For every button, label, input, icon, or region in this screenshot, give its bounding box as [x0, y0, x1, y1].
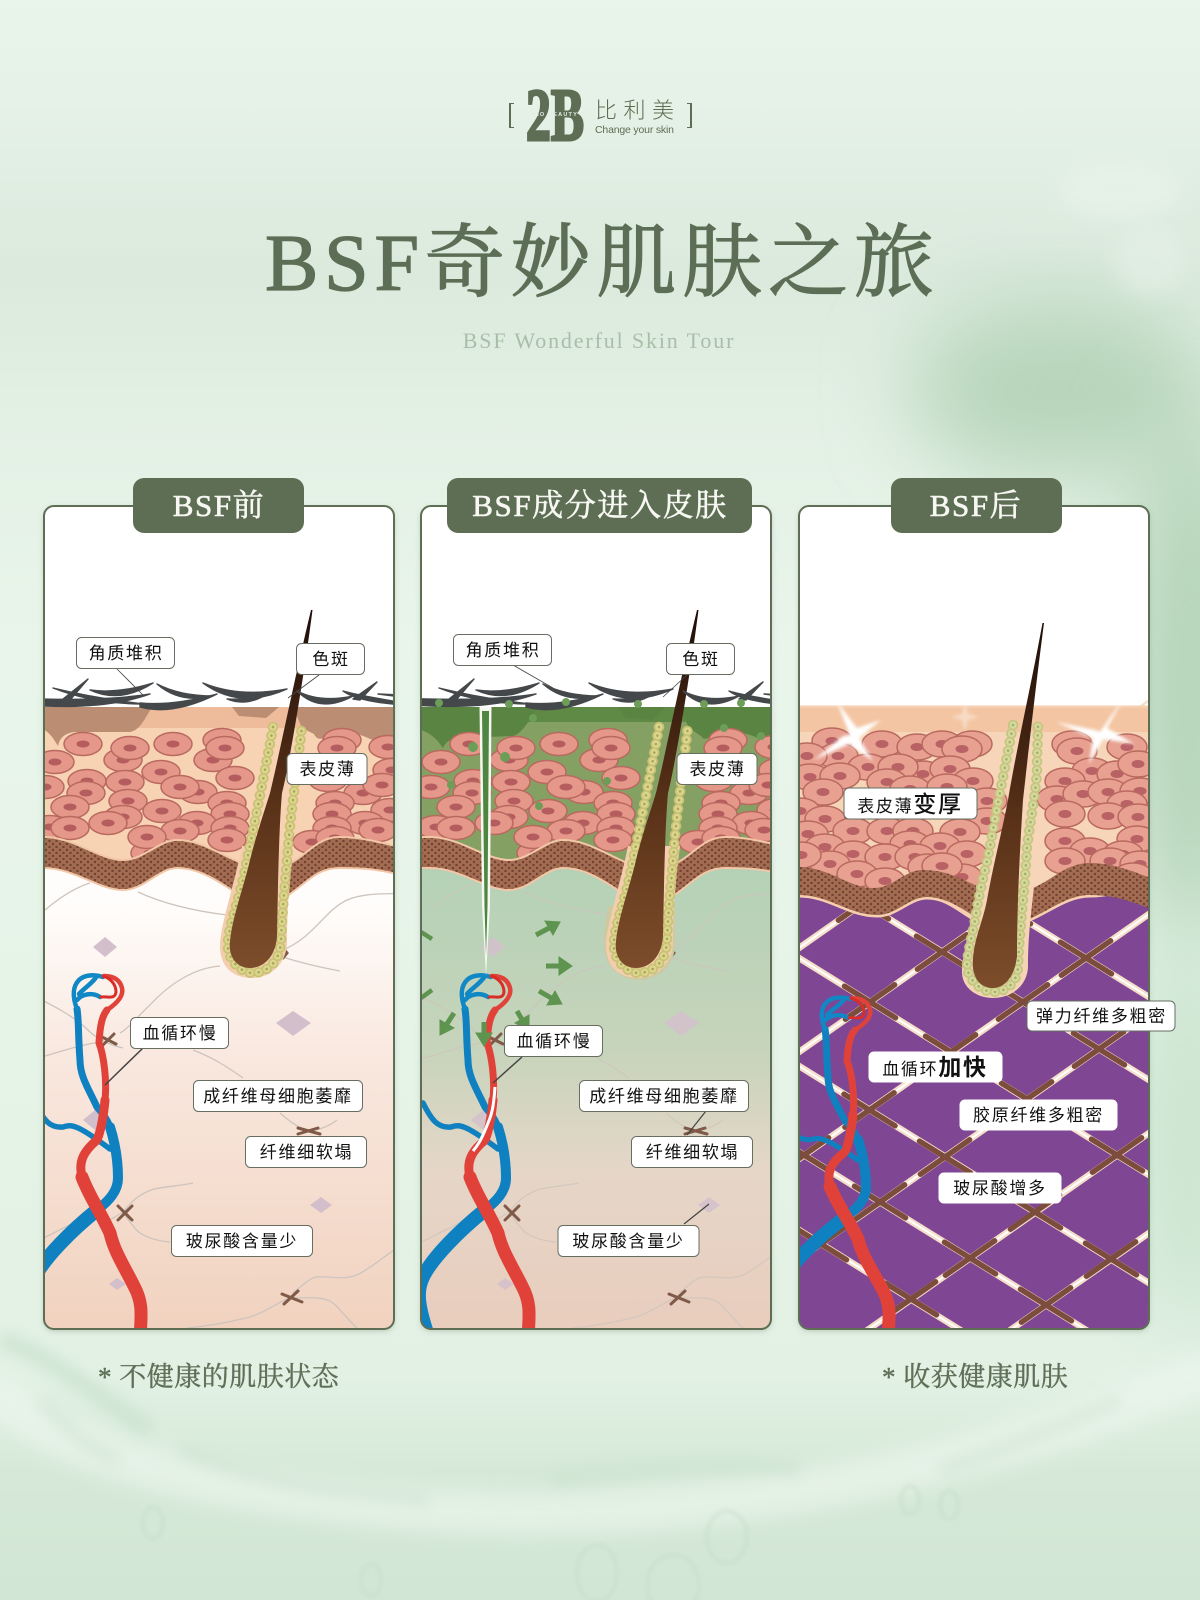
needle of ingredients [480, 707, 492, 976]
heading tab: BSF后: BSF后 [930, 488, 1022, 523]
label: 表皮薄: 表皮薄 [299, 760, 356, 779]
label: 纤维细软塌 [246, 1136, 366, 1168]
water bubbles [143, 1486, 958, 1600]
heading tab: BSF前: BSF前 [173, 488, 265, 523]
label: 角质堆积: 角质堆积 [89, 644, 163, 663]
panel 1 skin illustration [45, 610, 393, 1328]
label: 色斑: 色斑 [312, 650, 350, 669]
label: 胶原纤维多粗密 [960, 1100, 1117, 1130]
epidermis [789, 708, 1159, 920]
label: 血循环慢 [130, 1018, 228, 1048]
label: 纤维细软塌: 纤维细软塌 [646, 1143, 739, 1162]
hair and follicle [962, 623, 1044, 998]
logo: 2B [526, 75, 584, 157]
panel: BSF ingredients entering skin [418, 505, 774, 1334]
label: 弹力纤维多粗密: 弹力纤维多粗密 [1036, 1007, 1167, 1026]
label: 表皮薄: 表皮薄 [689, 760, 746, 779]
logo: BIO BEAUTY [532, 112, 578, 118]
label: 玻尿酸含量少: 玻尿酸含量少 [186, 1232, 298, 1251]
label: 血循环慢: 血循环慢 [517, 1031, 591, 1051]
label: 色斑 [296, 644, 364, 674]
footnote: healthy skin: * 收获健康肌肤 [882, 1362, 1068, 1392]
label: 成纤维母细胞萎靡: 成纤维母细胞萎靡 [589, 1086, 739, 1106]
purple dermis [799, 876, 1149, 1329]
sparkles [814, 706, 1134, 764]
label: 角质堆积 [454, 634, 552, 666]
leader lines panel 1 [105, 669, 319, 1085]
label: 成纤维母细胞萎靡 [194, 1080, 362, 1112]
label: 成纤维母细胞萎靡 [580, 1080, 748, 1112]
subtitle: BSF Wonderful Skin Tour [463, 328, 735, 353]
label: 角质堆积 [76, 638, 174, 668]
label: 血循环慢: 血循环慢 [143, 1023, 217, 1043]
label: 纤维细软塌: 纤维细软塌 [260, 1143, 353, 1162]
heading tab: BSF成分进入皮肤: BSF成分进入皮肤 [472, 488, 728, 523]
vessels [800, 995, 896, 1328]
white ingredient channel in vessel [473, 1087, 495, 1151]
label: 成纤维母细胞萎靡: 成纤维母细胞萎靡 [203, 1086, 353, 1106]
panel: BSF after [796, 505, 1152, 1334]
heading tab: BSF成分进入皮肤 [447, 478, 752, 533]
logo [509, 75, 692, 157]
label: 色斑: 色斑 [682, 650, 720, 669]
label: 玻尿酸增多 [939, 1173, 1061, 1203]
green ingredient dots [435, 698, 765, 810]
label: 表皮薄 [287, 754, 367, 784]
heading tab: BSF前 [133, 478, 304, 533]
label: 血循环加快: 血循环加快 [882, 1054, 988, 1080]
label: 纤维细软塌 [632, 1136, 752, 1168]
arrows: ingredient spread [421, 921, 572, 1046]
logo: Change your skin [595, 124, 674, 136]
label: 血循环加快 [869, 1052, 1002, 1082]
panel: BSF before [42, 505, 396, 1334]
basal layer [789, 863, 1159, 920]
label: 表皮薄 [677, 754, 757, 784]
collagen crossings [778, 886, 1142, 1322]
label: 玻尿酸含量少: 玻尿酸含量少 [572, 1232, 685, 1251]
panel 3 skin illustration [800, 623, 1148, 1328]
collagen lattice [800, 700, 1148, 1328]
label: 胶原纤维多粗密: 胶原纤维多粗密 [973, 1106, 1104, 1125]
cells [800, 727, 1148, 888]
label: 表皮薄变厚 [844, 788, 977, 819]
label: 血循环慢 [504, 1026, 602, 1056]
label: 玻尿酸含量少 [172, 1226, 312, 1256]
heading tab: BSF后 [891, 478, 1062, 533]
title: BSF奇妙肌肤之旅 [265, 220, 940, 308]
footnote: unhealthy skin: * 不健康的肌肤状态 [98, 1362, 340, 1392]
label: 色斑 [666, 644, 734, 674]
panel 2 skin illustration [422, 610, 770, 1328]
label: 玻尿酸增多: 玻尿酸增多 [953, 1179, 1047, 1198]
leader lines panel 2 [493, 665, 709, 1224]
label: 玻尿酸含量少 [558, 1226, 699, 1256]
label: 表皮薄变厚: 表皮薄变厚 [857, 791, 963, 817]
label: 角质堆积: 角质堆积 [466, 641, 540, 660]
label: 弹力纤维多粗密 [1027, 1001, 1175, 1031]
logo: 比利美 [595, 98, 681, 123]
